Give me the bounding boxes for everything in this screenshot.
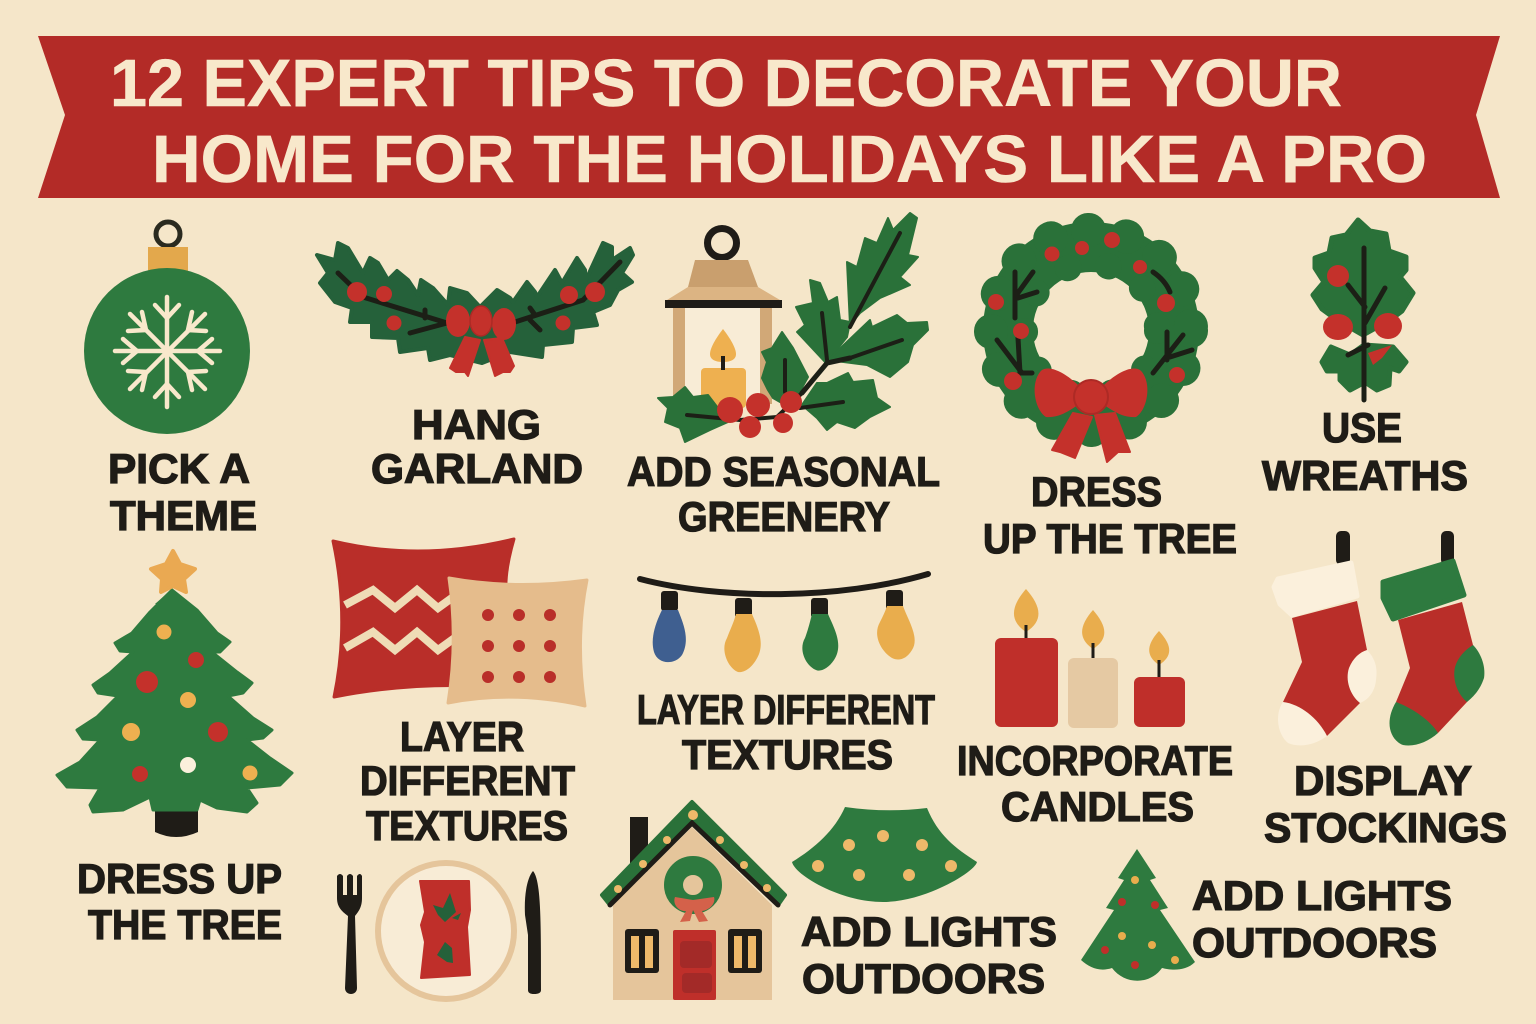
label: dress up the tree (lower): DRESS UP <box>77 855 282 902</box>
label: hang garland <box>371 401 583 492</box>
label: dress up the tree (upper): UP THE TREE <box>983 515 1237 562</box>
label: add lights outdoors (right): OUTDOORS <box>1192 919 1437 966</box>
label: dress up the tree (lower) <box>77 855 282 948</box>
icon: holly sprig <box>1313 220 1413 400</box>
icon: tree skirt <box>792 807 977 902</box>
label: layer different textures (left) <box>360 713 575 849</box>
label: add lights outdoors (right): ADD LIGHTS <box>1192 872 1452 919</box>
icon: house with wreath <box>602 802 785 1000</box>
label: use wreaths: USE <box>1322 404 1402 451</box>
label: display stockings: STOCKINGS <box>1264 804 1507 851</box>
label: use wreaths <box>1262 404 1468 499</box>
label: dress up the tree (upper): DRESS <box>1031 468 1162 515</box>
icon: wreath with bow <box>988 230 1192 462</box>
title banner: HOME FOR THE HOLIDAYS LIKE A PRO <box>152 122 1427 197</box>
icon: table place setting <box>337 860 541 1002</box>
icon: ornament with snowflake <box>84 222 250 434</box>
label: add lights outdoors (right) <box>1192 872 1452 966</box>
title banner: 12 EXPERT TIPS TO DECORATE YOUR <box>110 46 1342 121</box>
label: incorporate candles <box>957 737 1233 830</box>
icon: string lights <box>640 574 928 672</box>
label: layer different textures (left): TEXTURES <box>366 802 568 849</box>
label: hang garland: GARLAND <box>371 445 583 492</box>
label: display stockings <box>1264 757 1507 851</box>
icon: stockings <box>1274 531 1484 745</box>
label: hang garland: HANG <box>412 401 541 448</box>
label: layer different textures (left): LAYER <box>400 713 524 760</box>
label: pick a theme <box>108 445 257 539</box>
label: dress up the tree (lower): THE TREE <box>88 901 282 948</box>
label: layer different textures (center) <box>637 686 935 778</box>
label: use wreaths: WREATHS <box>1262 452 1468 499</box>
icon: layered pillows <box>333 539 587 706</box>
label: display stockings: DISPLAY <box>1294 757 1472 804</box>
label: layer different textures (center): LAYER DIFFERENT <box>637 686 935 733</box>
label: layer different textures (left): DIFFERENT <box>360 757 575 804</box>
label: add seasonal greenery <box>627 448 940 540</box>
label: incorporate candles: INCORPORATE <box>957 737 1233 784</box>
label: add seasonal greenery: GREENERY <box>678 493 890 540</box>
icon: christmas tree <box>57 551 292 837</box>
title banner <box>38 36 1500 198</box>
label: incorporate candles: CANDLES <box>1001 783 1194 830</box>
label: add lights outdoors (center) <box>801 908 1057 1002</box>
label: add lights outdoors (center): ADD LIGHTS <box>801 908 1057 955</box>
label: add seasonal greenery: ADD SEASONAL <box>627 448 940 495</box>
icon: lantern with holly greenery <box>658 213 928 442</box>
label: dress up the tree (upper) <box>983 468 1237 562</box>
label: layer different textures (center): TEXTURES <box>682 731 893 778</box>
icon: candles <box>995 589 1185 728</box>
icon: garland with bow <box>317 243 633 376</box>
label: pick a theme: PICK A <box>108 445 250 492</box>
label: pick a theme: THEME <box>110 492 257 539</box>
icon: small christmas tree <box>1081 849 1195 981</box>
label: add lights outdoors (center): OUTDOORS <box>802 955 1045 1002</box>
